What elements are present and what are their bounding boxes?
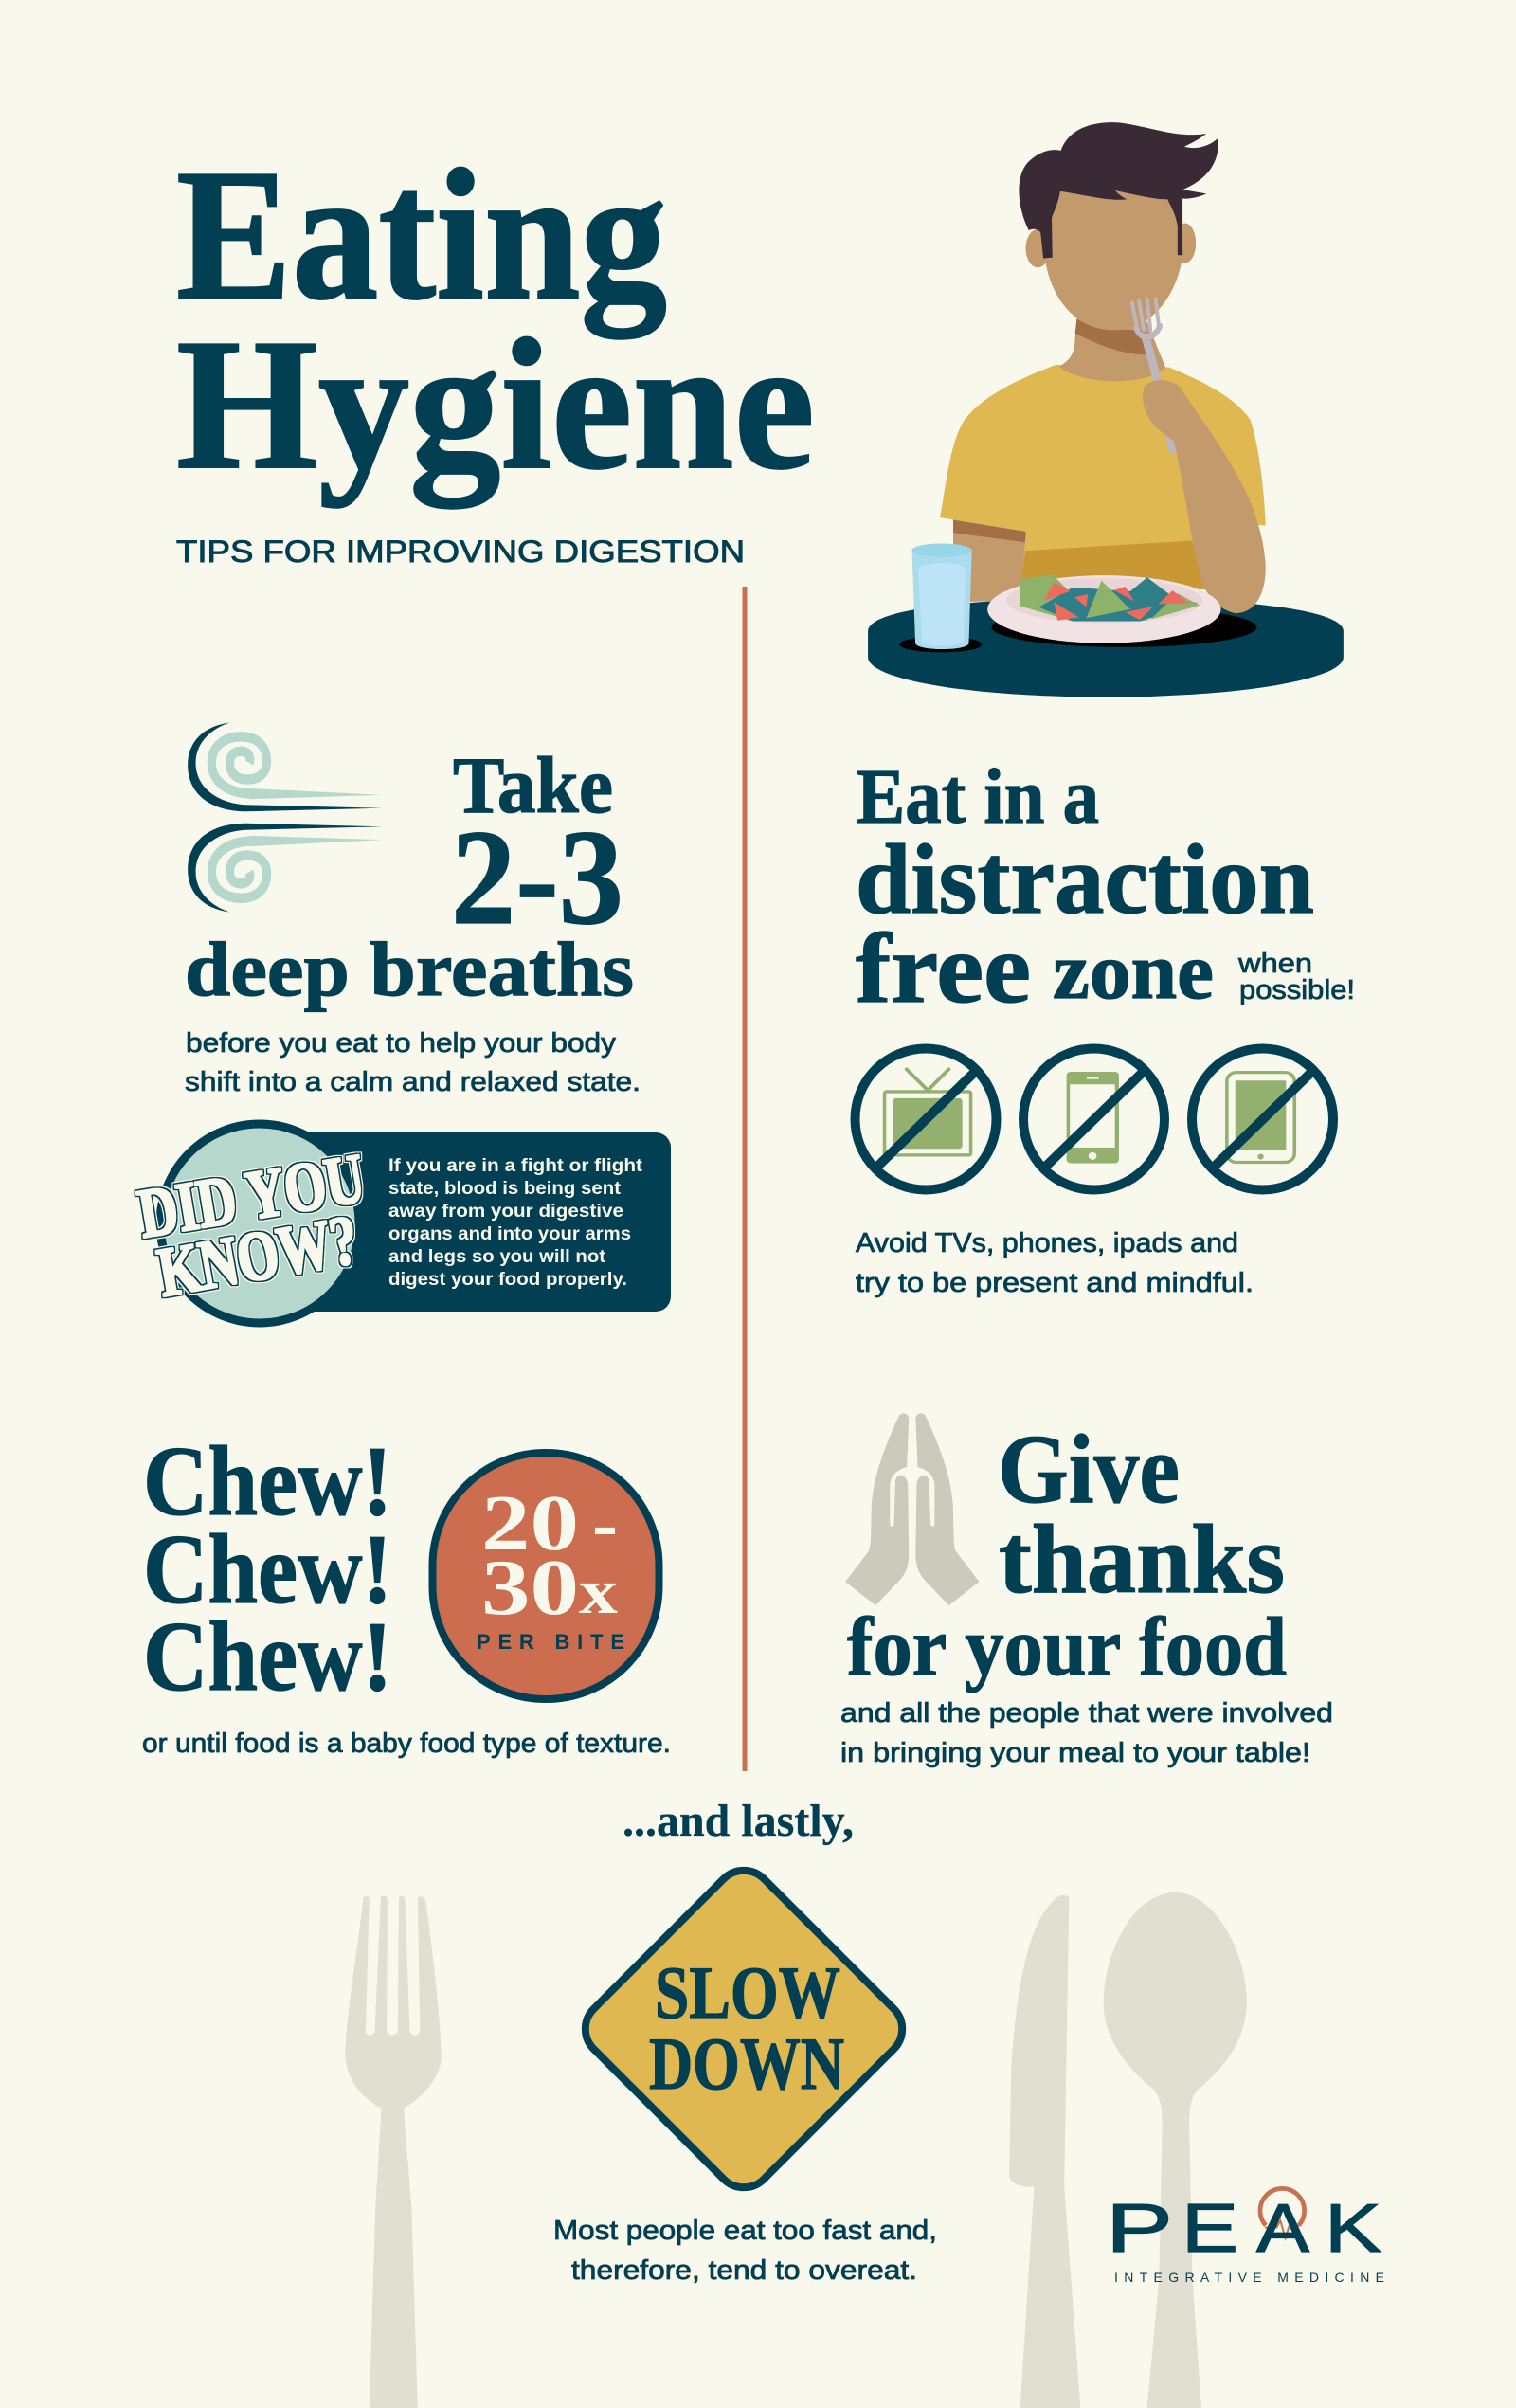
heading: take 2-3 deep breaths: 2-3 (451, 803, 623, 953)
heading: eat in a distraction free zone: zone (1053, 927, 1214, 1016)
badge: 20-30x per bite: PER BITE (477, 1630, 624, 1654)
hand and forearm (1143, 380, 1266, 613)
icon: no phone (1023, 1048, 1164, 1190)
heading: give thanks for your food: for your food (847, 1602, 1287, 1693)
logo ring and pulse (1260, 2188, 1305, 2238)
upper swirl (188, 723, 383, 811)
subtitle: TIPS FOR IMPROVING DIGESTION (176, 534, 745, 569)
badge: 20-30x per bite (432, 1453, 659, 1699)
icon: no tablet (1192, 1048, 1333, 1190)
ears (1025, 224, 1196, 267)
heading: give thanks for your food (847, 1415, 1287, 1693)
text: eat too fast (553, 2216, 937, 2286)
title (176, 131, 815, 509)
badge: 20-30x per bite: 20 (481, 1479, 579, 1567)
logo wordmark: A (1256, 2191, 1309, 2267)
heading: eat in a distraction free zone: distraction (856, 824, 1314, 934)
callout text: If you are in a fight or flight (388, 1155, 643, 1176)
left arm (953, 519, 1026, 602)
heading: take 2-3 deep breaths (185, 741, 634, 1012)
icon: knife silhouette (1009, 1895, 1080, 2408)
icon: fork silhouette (345, 1896, 442, 2408)
text: baby food texture: or until food is a baby food type of texture. (142, 1729, 671, 1759)
badge: 20-30x per bite: x (579, 1555, 618, 1627)
sign: slow down: SLOW (655, 1951, 840, 2034)
title: Eating (176, 131, 667, 339)
callout text: state, blood is being sent (388, 1178, 622, 1199)
fork (1132, 299, 1172, 450)
did you know lettering: KNOW? (153, 1201, 364, 1313)
text: eat too fast: Most people eat too fast and, (553, 2216, 937, 2246)
logo wordmark: E (1182, 2191, 1238, 2267)
text: and lastly: ...and lastly, (623, 1796, 854, 1846)
title: Hygiene (176, 300, 815, 509)
lower swirl (188, 824, 383, 912)
text: when possible: possible! (1239, 975, 1355, 1005)
text: thanks description: in bringing your meal to your table! (840, 1738, 1310, 1768)
heading: chew chew chew (143, 1425, 392, 1711)
salad (1020, 574, 1200, 622)
logo wordmark: P (1106, 2191, 1173, 2267)
illustration: man eating at table (868, 122, 1344, 697)
heading: chew chew chew: Chew! (143, 1425, 392, 1536)
sign: slow down: DOWN (649, 2022, 844, 2105)
callout text: organs and into your arms (388, 1223, 631, 1244)
badge: 20-30x per bite: - (592, 1479, 618, 1567)
text: eat too fast: therefore, tend to overeat. (571, 2255, 917, 2286)
heading: give thanks for your food: Give (998, 1415, 1180, 1524)
heading: eat in a distraction free zone (856, 752, 1314, 1023)
sign: slow down (573, 1858, 914, 2200)
icons: no screens (855, 1048, 1333, 1190)
text: breaths description: shift into a calm and relaxed state. (185, 1067, 641, 1097)
heading: take 2-3 deep breaths: Take (453, 741, 613, 830)
mint circle (160, 1124, 359, 1323)
did you know lettering: DID YOU (133, 1139, 370, 1254)
heading: take 2-3 deep breaths: deep breaths (185, 926, 634, 1012)
logo tagline: INTEGRATIVE MEDICINE (1114, 2270, 1384, 2285)
table (868, 598, 1344, 697)
glass of water (911, 543, 972, 649)
text: when possible (1237, 949, 1355, 1005)
callout text: and legs so you will not (388, 1246, 606, 1267)
heading: eat in a distraction free zone: free (856, 913, 1031, 1023)
icon: wind (188, 723, 383, 912)
text: thanks description (840, 1698, 1333, 1768)
text: avoid screens (856, 1228, 1254, 1298)
text: when possible: when (1237, 949, 1312, 979)
heading: eat in a distraction free zone: Eat in a (857, 752, 1099, 840)
center divider (743, 587, 747, 1771)
logo wordmark: K (1325, 2191, 1381, 2267)
text: breaths description: before you eat to help your body (186, 1028, 617, 1059)
callout text: away from your digestive (388, 1201, 623, 1222)
did you know lettering (133, 1139, 370, 1313)
shirt (940, 365, 1266, 589)
text: breaths description (185, 1028, 641, 1097)
heading: chew chew chew: Chew! (143, 1601, 392, 1711)
badge: 20-30x per bite: 30 (481, 1544, 579, 1632)
icon: praying hands (845, 1413, 980, 1605)
heading: chew chew chew: Chew! (143, 1513, 392, 1624)
text: avoid screens: try to be present and mindful. (856, 1268, 1254, 1298)
logo wordmark (1106, 2191, 1381, 2267)
plate shadow (991, 607, 1256, 647)
hair (1019, 122, 1218, 259)
text: thanks description: and all the people that were involved (840, 1698, 1333, 1729)
plate (987, 575, 1221, 643)
glass shadow (899, 637, 982, 652)
text: avoid screens: Avoid TVs, phones, ipads and (856, 1228, 1238, 1258)
icon: spoon silhouette (1104, 1892, 1247, 2408)
callout text (388, 1155, 643, 1290)
logo: peak integrative medicine (1106, 2188, 1384, 2285)
heading: give thanks for your food: thanks (999, 1505, 1285, 1614)
panel: did you know (133, 1124, 671, 1323)
head (1046, 183, 1182, 330)
icon: no tv (855, 1048, 997, 1190)
callout box (284, 1132, 671, 1312)
callout text: digest your food properly. (388, 1269, 627, 1290)
neck (1059, 318, 1165, 381)
